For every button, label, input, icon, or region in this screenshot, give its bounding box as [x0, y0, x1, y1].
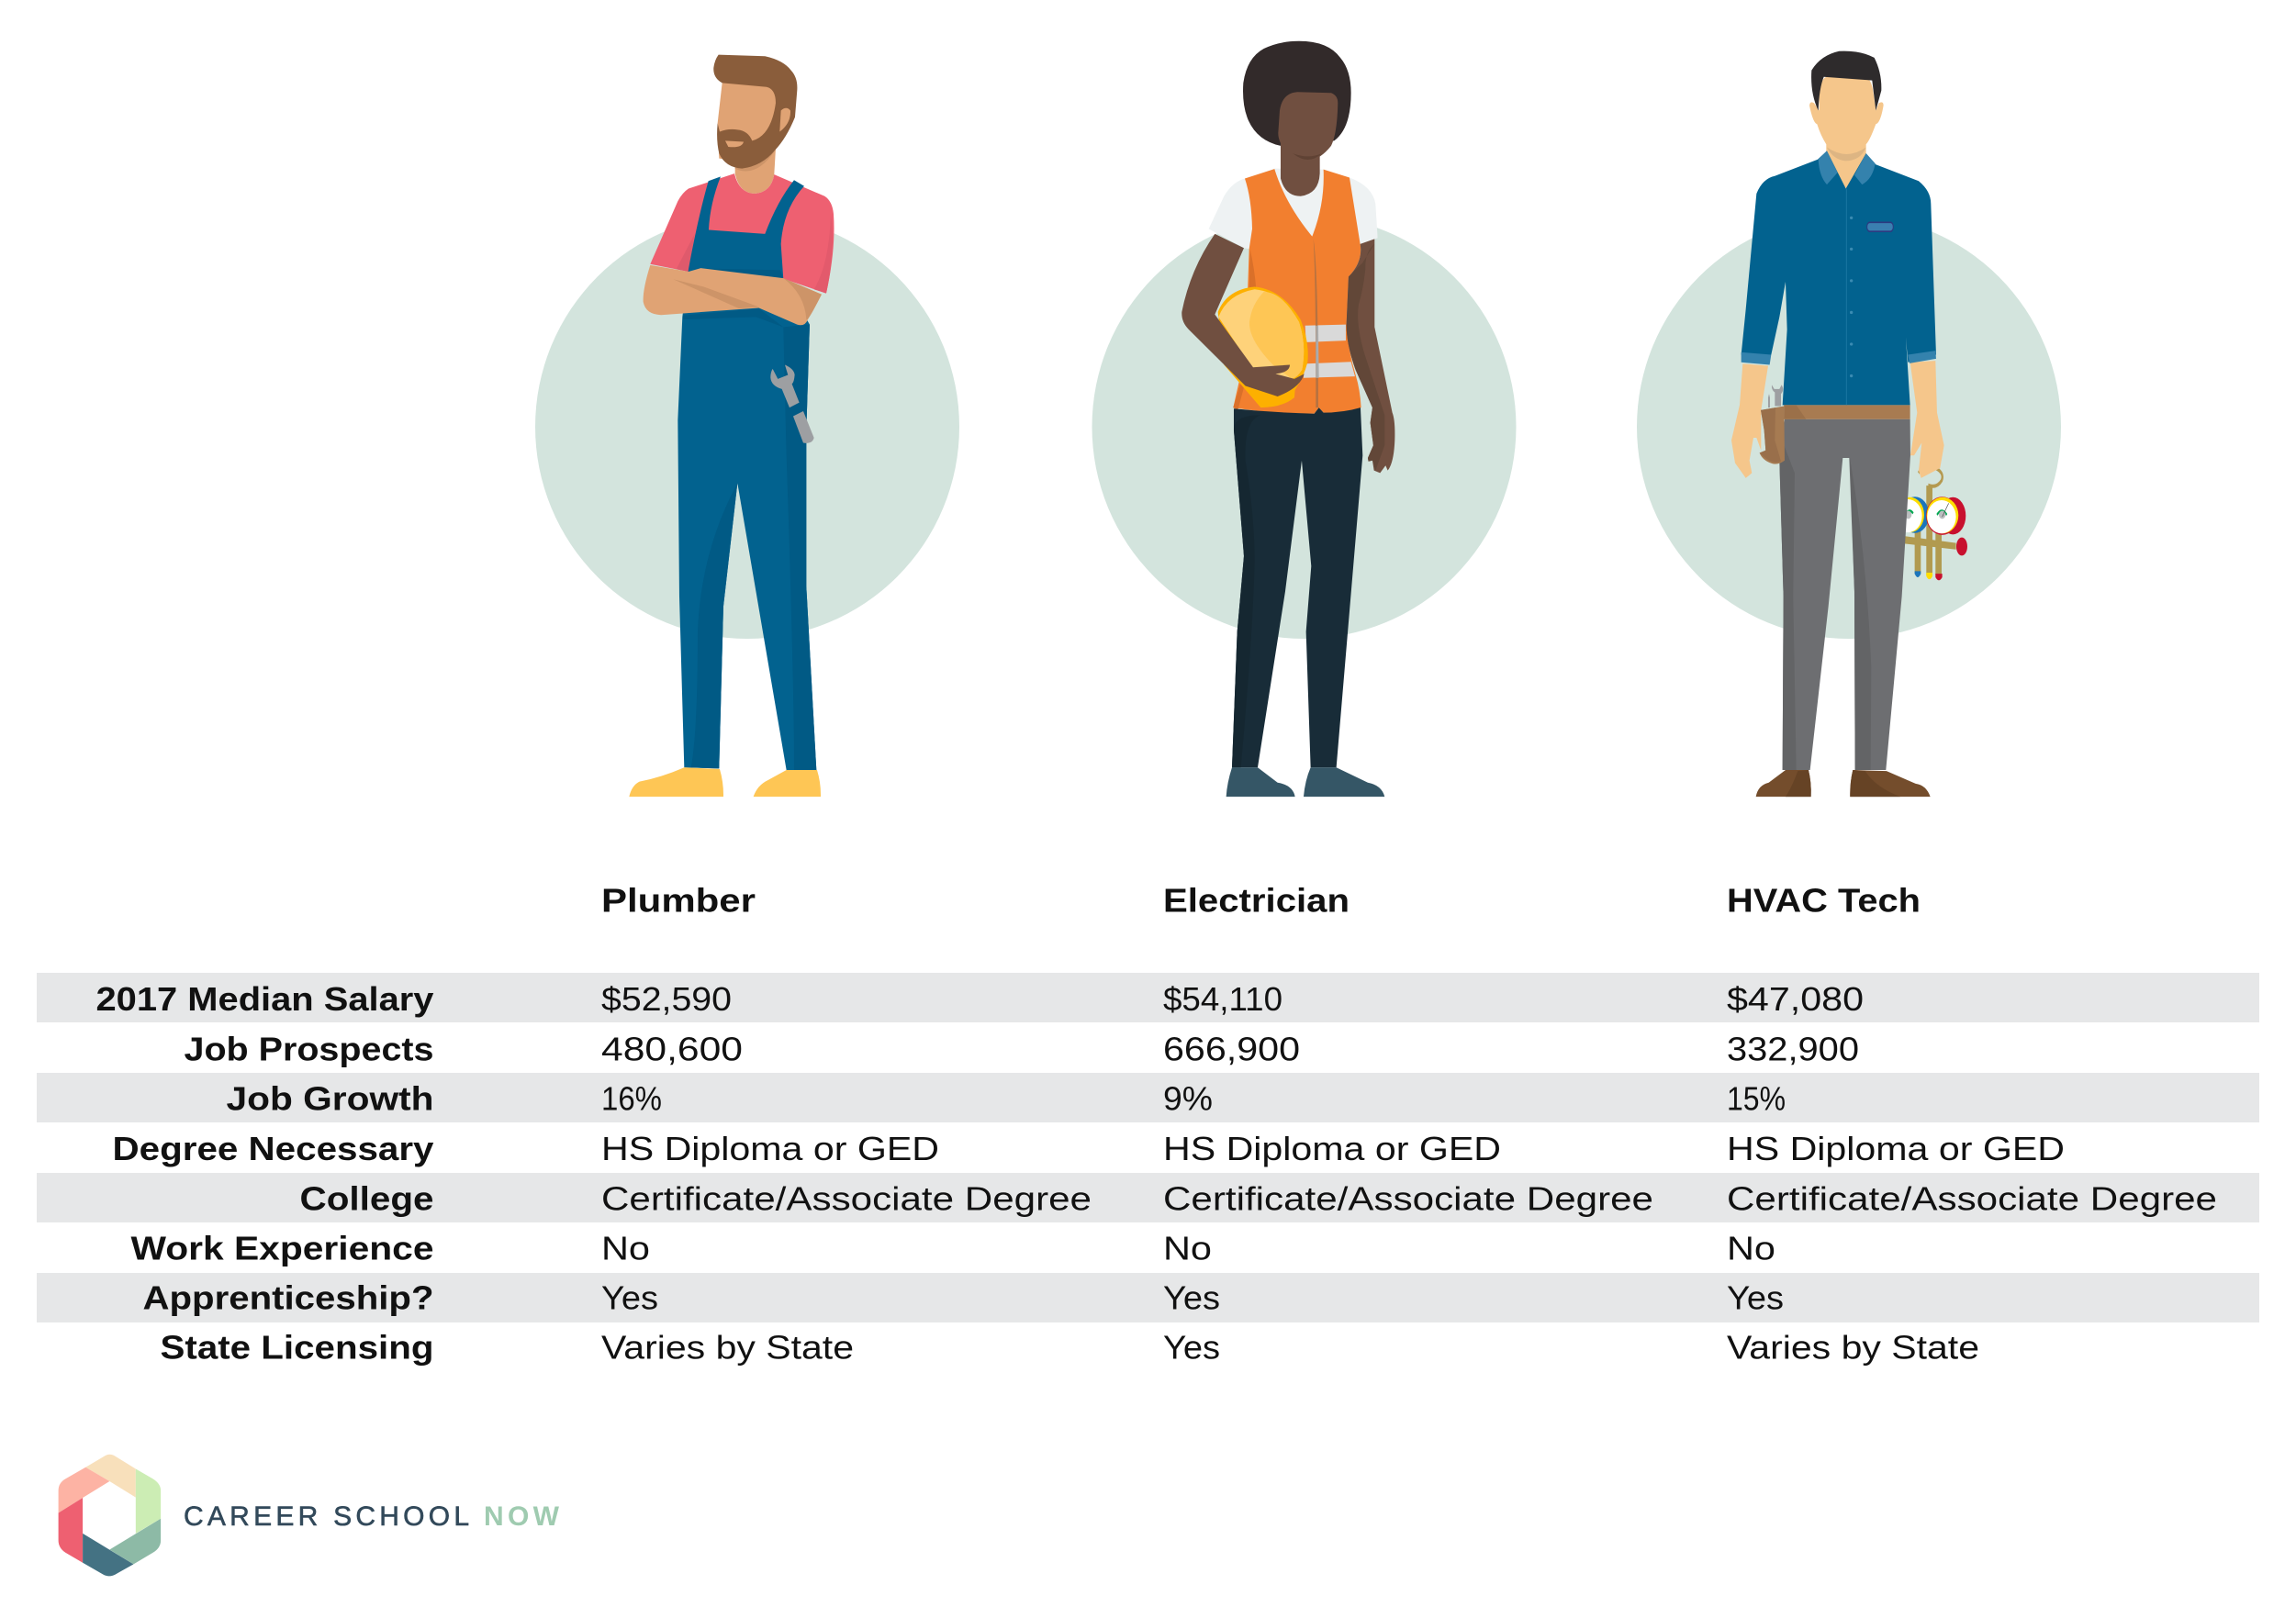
table row: Job Prospects	[184, 1030, 1859, 1068]
panel: plumber illustration	[535, 55, 959, 797]
table row: Job Prospects: 332,900	[1727, 1030, 1859, 1068]
table row: Job Growth: 9%	[1163, 1079, 1213, 1118]
figure: HVAC tech	[1731, 51, 1967, 797]
background circle: electrician	[1092, 215, 1517, 639]
table row: Work Experience: No	[1163, 1230, 1212, 1267]
table row: 2017 Median Salary: $52,590	[601, 980, 732, 1018]
table row: College: Certificate/Associate Degree	[601, 1180, 1092, 1217]
table row: Apprenticeship?: Yes	[601, 1279, 658, 1316]
table row: Degree Necessary: HS Diploma or GED	[1163, 1130, 1501, 1167]
icon: wrench	[770, 364, 814, 443]
icon: manifold gauges	[1894, 466, 1967, 580]
table row: 2017 Median Salary: $47,080	[1727, 980, 1864, 1018]
table row: Job Growth: 16%	[601, 1079, 662, 1118]
table row: Apprenticeship?: Apprenticeship?	[143, 1279, 433, 1316]
table row: Job Growth: Job Growth	[226, 1079, 433, 1118]
icon: hexagon mark	[59, 1455, 161, 1576]
table row: Work Experience: No	[1727, 1230, 1775, 1267]
table row: Job Growth: 15%	[1727, 1079, 1786, 1118]
table row: College: College	[299, 1180, 433, 1217]
table row: State Licensing: Varies by State	[601, 1329, 854, 1366]
table row: Degree Necessary: Degree Necessary	[112, 1130, 433, 1167]
logo: Career School Now: NOW	[484, 1501, 560, 1532]
table row: State Licensing	[160, 1329, 1979, 1366]
table row: Degree Necessary	[112, 1130, 2065, 1167]
table row: 2017 Median Salary: 2017 Median Salary	[95, 980, 433, 1018]
table row: Job Prospects: 480,600	[601, 1030, 743, 1068]
table header row: HVAC Tech	[1727, 881, 1921, 920]
table row: Apprenticeship?: Yes	[1727, 1279, 1784, 1316]
table row: Job Prospects: 666,900	[1163, 1030, 1300, 1068]
logo wordmark: CAREER SCHOOL	[184, 1501, 469, 1532]
table row: State Licensing: Yes	[1163, 1329, 1220, 1366]
table row: Work Experience: No	[601, 1230, 650, 1267]
icon: tool pouch	[1760, 385, 1785, 464]
table row: Job Growth	[37, 1073, 2259, 1122]
table row: Work Experience: Work Experience	[130, 1230, 434, 1267]
table row: Apprenticeship?	[37, 1273, 2259, 1322]
table row: Degree Necessary: HS Diploma or GED	[1727, 1130, 2065, 1167]
figure: plumber	[629, 55, 834, 797]
table header row: Electrician	[1163, 881, 1350, 920]
panel: electrician illustration	[1092, 41, 1517, 797]
table row: Apprenticeship?: Yes	[1163, 1279, 1220, 1316]
panel: HVAC tech illustration	[1637, 51, 2061, 797]
table row: College	[37, 1173, 2259, 1222]
table row: 2017 Median Salary: $54,110	[1163, 980, 1282, 1018]
table row: College: Certificate/Associate Degree	[1163, 1180, 1653, 1217]
figure: electrician	[1182, 41, 1394, 797]
table row: College: Certificate/Associate Degree	[1727, 1180, 2217, 1217]
icon: hard hat	[1218, 286, 1308, 407]
table row: State Licensing: Varies by State	[1727, 1329, 1979, 1366]
background circle: plumber	[535, 215, 959, 639]
table header row	[601, 881, 1921, 920]
table row: State Licensing: State Licensing	[160, 1329, 433, 1366]
background circle: HVAC tech	[1637, 215, 2061, 639]
table row: Degree Necessary: HS Diploma or GED	[601, 1130, 939, 1167]
table header row: Plumber	[601, 881, 756, 920]
table row: Job Prospects: Job Prospects	[184, 1030, 433, 1068]
logo: Career School Now	[59, 1455, 560, 1576]
table row: Work Experience	[130, 1230, 1775, 1267]
table row: 2017 Median Salary	[37, 973, 2259, 1022]
